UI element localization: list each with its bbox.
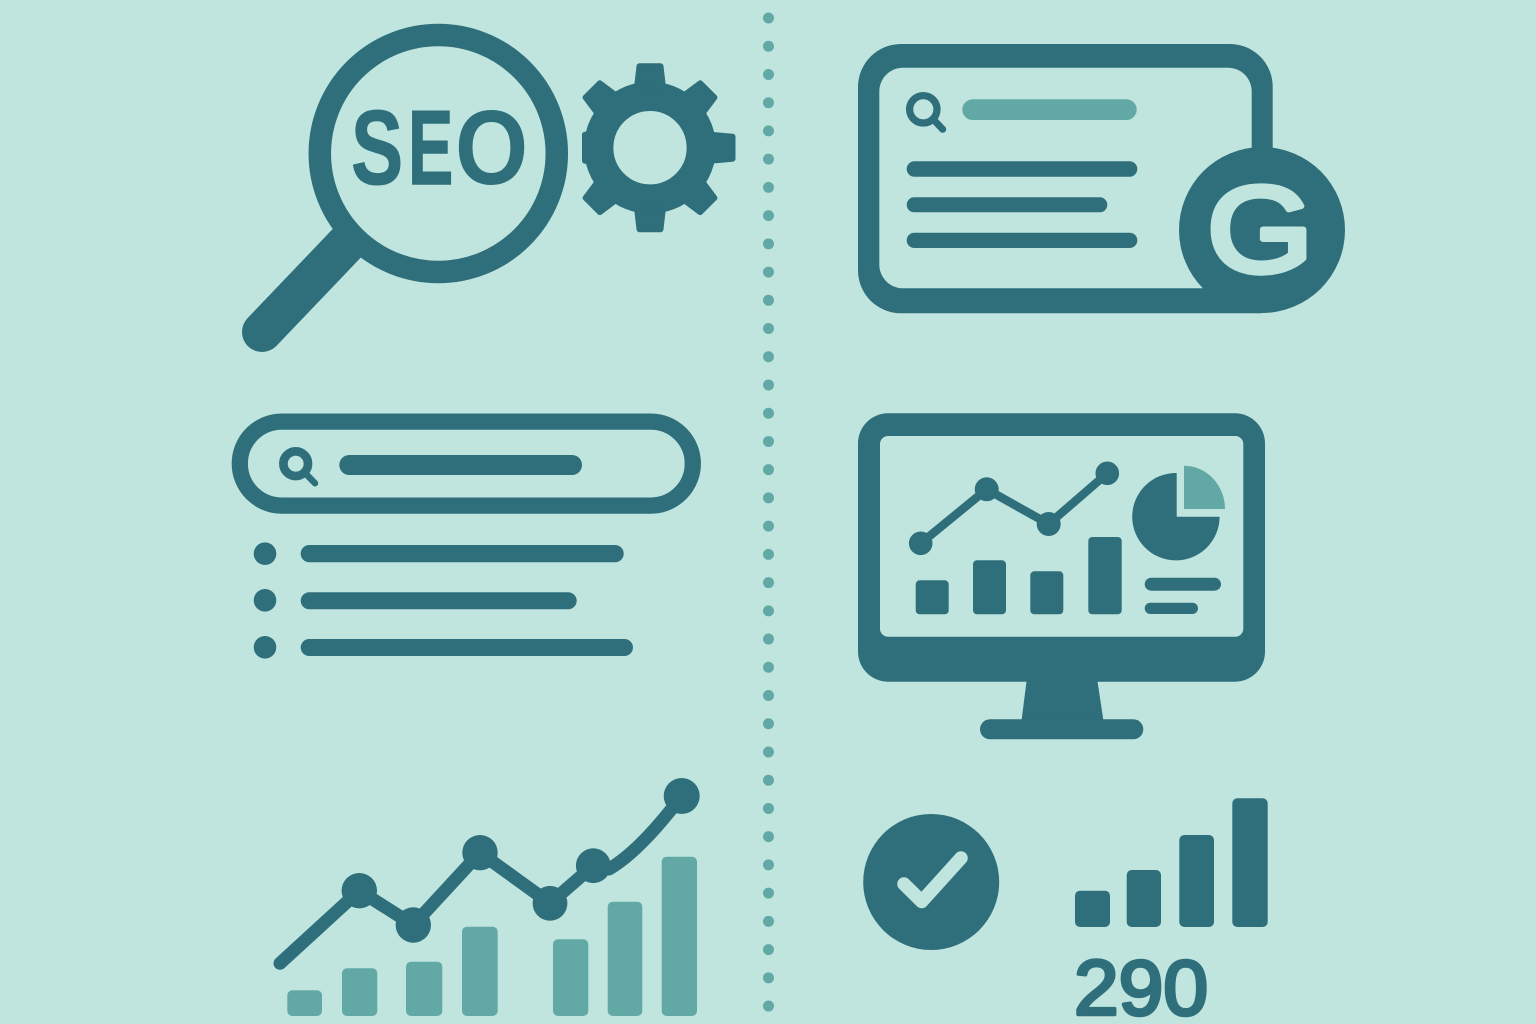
- result line 3: [907, 233, 1137, 248]
- chart: rising bars: [1075, 798, 1268, 927]
- SEO lettering: E: [408, 89, 454, 207]
- SEO lettering: [351, 89, 528, 207]
- search field: [240, 422, 693, 506]
- icon: magnifying glass: [262, 35, 557, 332]
- teal bars: [287, 857, 697, 1016]
- bar chart: [916, 537, 1122, 614]
- pie chart: [1132, 473, 1220, 560]
- list bullet 2: [254, 589, 276, 612]
- card frame: [858, 44, 1273, 313]
- panel: search bar with result list: [240, 422, 693, 659]
- legend line 2: [1145, 603, 1198, 614]
- trend line: [280, 796, 682, 963]
- monitor base: [980, 719, 1143, 739]
- SEO lettering: S: [351, 89, 403, 207]
- field text bar: [339, 455, 582, 475]
- list line 2: [301, 592, 577, 609]
- badge letter: G: [1207, 162, 1313, 298]
- legend line 1: [1145, 578, 1221, 591]
- monitor stand: [1021, 680, 1104, 723]
- list bullet 1: [254, 542, 276, 565]
- chart: rising line over teal bars: [280, 778, 700, 1016]
- dotted vertical divider: [763, 18, 774, 1010]
- icon: gear: [584, 66, 732, 229]
- icon: field search: [283, 451, 315, 483]
- icon: check badge: [863, 814, 999, 950]
- list bullet 3: [254, 636, 276, 659]
- badge circle: [1179, 147, 1345, 313]
- trend points: [342, 778, 700, 943]
- line chart: [909, 462, 1119, 555]
- SEO lettering: O: [455, 89, 528, 207]
- result line 1: [907, 161, 1137, 177]
- result line 2: [907, 197, 1107, 212]
- list line 1: [301, 545, 624, 562]
- panel: search results card with G badge: [858, 44, 1345, 313]
- pie slice: [1184, 466, 1225, 509]
- list line 3: [301, 639, 633, 656]
- monitor body: [858, 413, 1265, 682]
- panel: analytics monitor: [858, 413, 1265, 739]
- icon: small search: [910, 96, 943, 129]
- query bar: [962, 99, 1137, 120]
